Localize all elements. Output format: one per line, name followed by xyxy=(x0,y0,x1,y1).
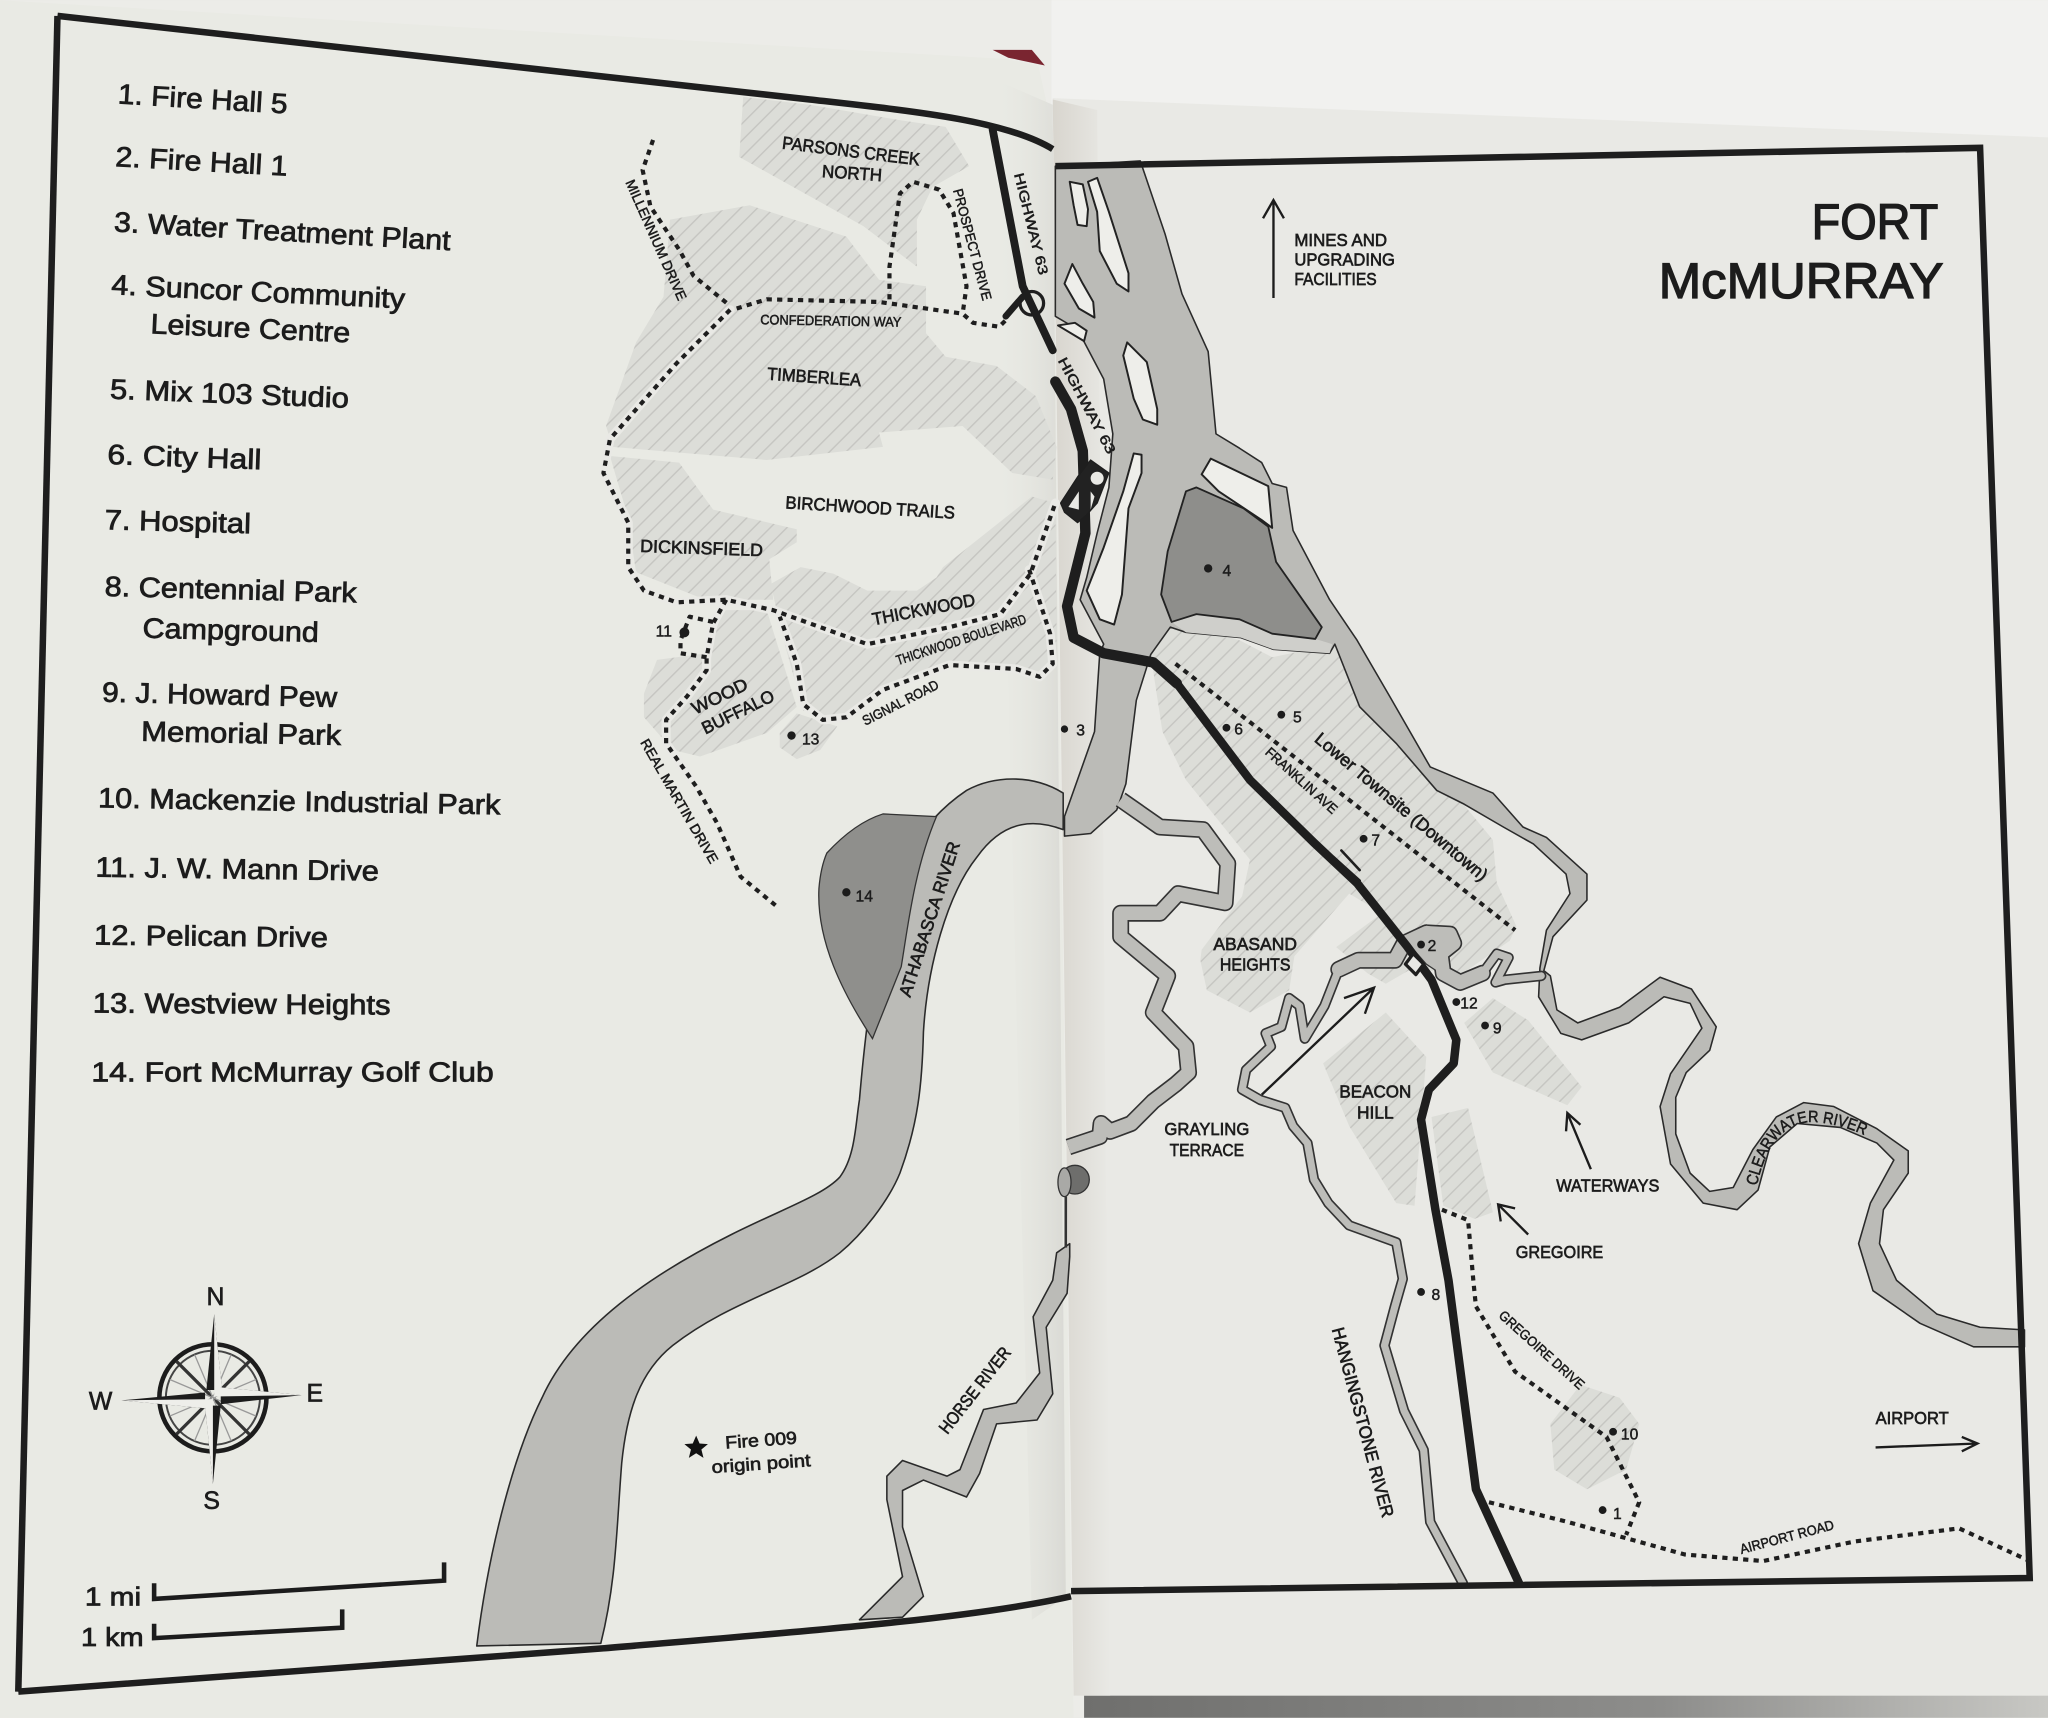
map labels: left page xyxy=(622,133,1119,1437)
map labels: right page: FACILITIES xyxy=(1294,269,1377,289)
river: Athabasca north channel and Clearwater xyxy=(1055,161,2024,1347)
map labels: left page: REAL MARTIN DRIVE xyxy=(637,736,721,866)
arrow: Grayling Terrace xyxy=(1262,988,1374,1095)
numbered points: 3 xyxy=(1076,723,1085,740)
page: right xyxy=(1053,98,2048,1696)
map labels: right page: GREGOIRE xyxy=(1516,1242,1603,1262)
neighbourhoods: left page xyxy=(606,97,1057,759)
compass rose: N xyxy=(207,1284,224,1311)
map labels: left page: CONFEDERATION WAY xyxy=(760,312,901,330)
road casing xyxy=(603,310,1055,787)
fire origin marker: origin point xyxy=(711,1450,811,1477)
map labels: right page: GREGOIRE DRIVE xyxy=(1496,1308,1587,1392)
numbered points: 14 xyxy=(856,888,873,905)
numbered points: 1 xyxy=(1613,1506,1622,1523)
neighbourhoods: right page xyxy=(1151,622,1639,1489)
map labels: left page: PROSPECT DRIVE xyxy=(950,187,994,302)
legend: 8. Centennial Park xyxy=(104,571,358,608)
legend: 3. Water Treatment Plant xyxy=(113,206,452,256)
river: Horse xyxy=(859,1244,1070,1620)
map labels: left page: NORTH xyxy=(821,161,883,185)
scale bar: kilometres xyxy=(81,1609,342,1652)
map labels: left page: THICKWOOD BOULEVARD xyxy=(894,612,1028,668)
map labels: right page: UPGRADING xyxy=(1294,249,1395,269)
legend: 4. Suncor Community xyxy=(111,269,406,314)
compass rose: W xyxy=(89,1389,113,1416)
map labels: right page: MINES AND xyxy=(1294,230,1387,250)
scale bar: miles xyxy=(85,1562,444,1611)
legend: Leisure Centre xyxy=(150,308,351,348)
legend: 6. City Hall xyxy=(107,439,262,475)
map labels: right page: Lower Townsite (Downtown) xyxy=(1311,729,1492,885)
arrow: Gregoire xyxy=(1498,1204,1528,1235)
legend: 14. Fort McMurray Golf Club xyxy=(91,1057,494,1088)
legend: 1. Fire Hall 5 xyxy=(117,78,289,119)
legend: 12. Pelican Drive xyxy=(94,920,328,953)
map labels: left page: HIGHWAY 63 xyxy=(1011,171,1051,277)
compass rose: S xyxy=(203,1488,220,1515)
map labels: right page: TERRACE xyxy=(1170,1140,1244,1160)
river: Athabasca (left page) xyxy=(477,779,1063,1646)
legend: 9. J. Howard Pew xyxy=(102,677,338,713)
map labels: right page: AIRPORT ROAD xyxy=(1738,1517,1836,1557)
fire origin marker xyxy=(684,1428,811,1477)
legend: Memorial Park xyxy=(141,716,342,751)
legend: 2. Fire Hall 1 xyxy=(115,141,288,182)
map labels: right page: CLEARWATER RIVER xyxy=(1746,1110,1868,1184)
map labels: left page: THICKWOOD xyxy=(870,590,977,629)
Suncor Community Leisure Centre area xyxy=(1161,487,1322,639)
map labels: left page: DICKINSFIELD xyxy=(640,536,763,560)
numbered points: 12 xyxy=(1460,996,1478,1013)
title: McMURRAY xyxy=(1659,253,1944,309)
numbered points: 2 xyxy=(1428,938,1436,955)
map labels: right page: HANGINGSTONE RIVER xyxy=(1328,1325,1398,1520)
page: left xyxy=(0,0,1074,1718)
map labels: left page: MILLENNIUM DRIVE xyxy=(622,177,689,303)
legend: 7. Hospital xyxy=(104,504,251,539)
map labels: right page xyxy=(1164,203,1949,1557)
arrow: Airport xyxy=(1876,1437,1977,1451)
compass rose: E xyxy=(307,1381,323,1408)
golf course band xyxy=(1172,614,1332,653)
scale bar: miles: 1 mi xyxy=(85,1581,141,1611)
dotted roads xyxy=(603,140,2030,1561)
map labels: left page: SIGNAL ROAD xyxy=(860,677,941,728)
map labels: left page: HORSE RIVER xyxy=(935,1343,1015,1437)
map labels: right page: HEIGHTS xyxy=(1220,955,1290,975)
map labels: right page: ABASAND xyxy=(1213,934,1297,954)
scale bar: kilometres: 1 km xyxy=(81,1622,144,1652)
map labels: right page: BEACON xyxy=(1339,1081,1411,1101)
map labels: left page: ATHABASCA RIVER xyxy=(895,839,964,999)
golf course 14 xyxy=(819,814,936,1039)
numbered points xyxy=(656,563,1639,1523)
map labels: left page: TIMBERLEA xyxy=(767,364,862,390)
map labels: right page: FRANKLIN AVE xyxy=(1262,744,1340,817)
fire origin marker: Fire 009 xyxy=(725,1428,798,1453)
map labels: left page: BUFFALO xyxy=(698,686,778,738)
numbered points: 4 xyxy=(1223,563,1232,580)
title: FORT xyxy=(1812,194,1938,250)
numbered points: 10 xyxy=(1621,1427,1639,1444)
map labels: right page: WATERWAYS xyxy=(1556,1175,1659,1195)
numbered points: 9 xyxy=(1493,1020,1502,1037)
map labels: left page: HIGHWAY 63 xyxy=(1055,355,1119,457)
map labels: left page: WOOD xyxy=(688,674,751,718)
legend xyxy=(91,78,502,1088)
numbered points: 5 xyxy=(1293,710,1302,727)
arrow: mines xyxy=(1263,200,1284,298)
numbered points: 13 xyxy=(802,732,820,749)
numbered points: 11 xyxy=(656,623,672,640)
numbered points: 7 xyxy=(1371,832,1380,849)
numbered points: 8 xyxy=(1432,1287,1441,1304)
legend: 13. Westview Heights xyxy=(93,987,391,1021)
arrow: Waterways xyxy=(1566,1113,1591,1169)
legend: 10. Mackenzie Industrial Park xyxy=(98,782,502,820)
pond on Horse River xyxy=(1058,1165,1089,1248)
islands xyxy=(1058,178,1272,625)
legend: Campground xyxy=(142,613,319,648)
river: south channel xyxy=(1068,800,1228,1147)
title xyxy=(1659,194,1944,309)
river: Hangingstone xyxy=(1242,925,1541,1583)
legend: 5. Mix 103 Studio xyxy=(109,374,350,414)
highway 63 xyxy=(993,130,1519,1583)
compass rose xyxy=(89,1284,323,1515)
legend: 11. J. W. Mann Drive xyxy=(95,852,379,887)
map labels: right page: GRAYLING xyxy=(1164,1119,1249,1139)
map labels: right page: AIRPORT xyxy=(1876,1408,1949,1428)
map labels: left page: BIRCHWOOD TRAILS xyxy=(785,492,956,523)
numbered points: 6 xyxy=(1234,721,1243,738)
map labels: right page: HILL xyxy=(1357,1102,1394,1122)
map labels: left page: PARSONS CREEK xyxy=(781,133,921,169)
